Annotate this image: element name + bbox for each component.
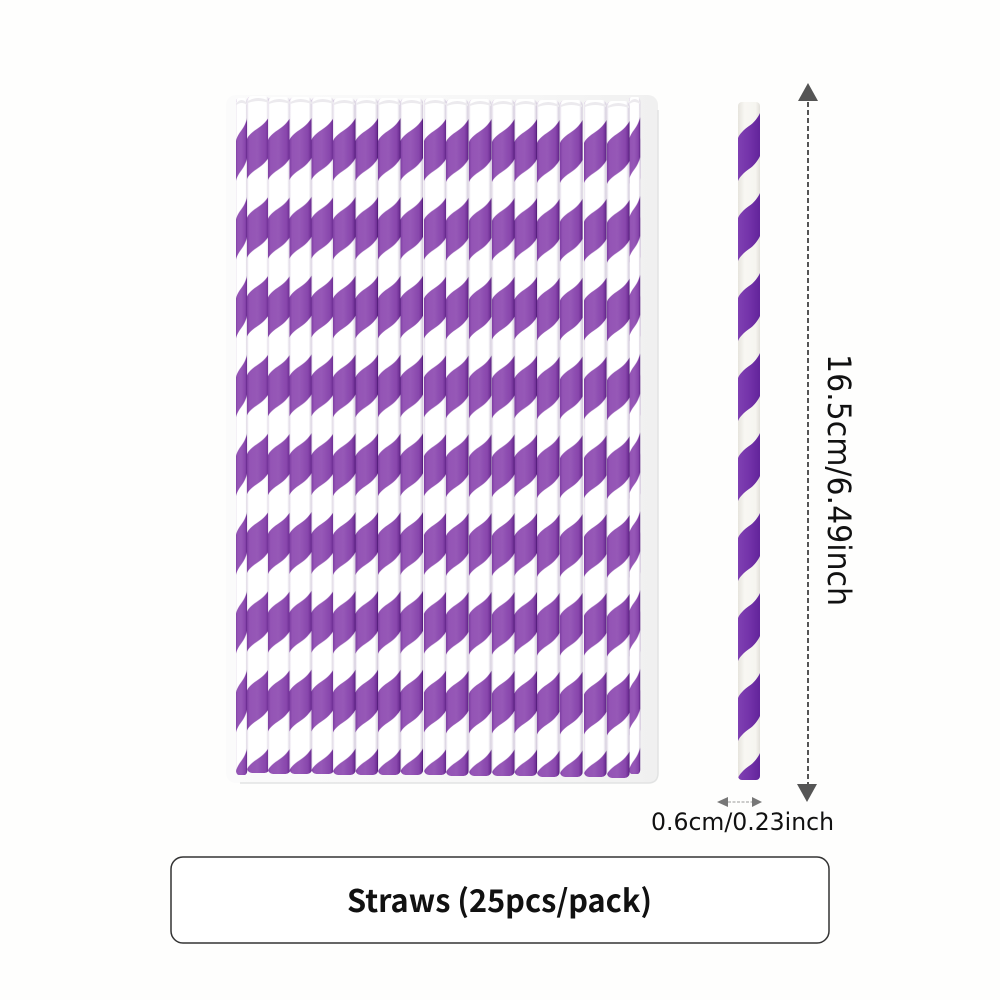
single straw	[738, 102, 760, 780]
caption box	[171, 857, 829, 943]
caption text: Straws (25pcs/pack)	[347, 876, 652, 921]
width label: 0.6cm/0.23inch	[651, 808, 834, 836]
clear plastic bag	[226, 95, 658, 783]
length label: 16.5cm/6.49inch	[820, 354, 858, 606]
length dimension arrow	[797, 83, 818, 802]
bundle of purple striped straws	[236, 96, 640, 778]
width dimension arrow	[717, 797, 762, 807]
